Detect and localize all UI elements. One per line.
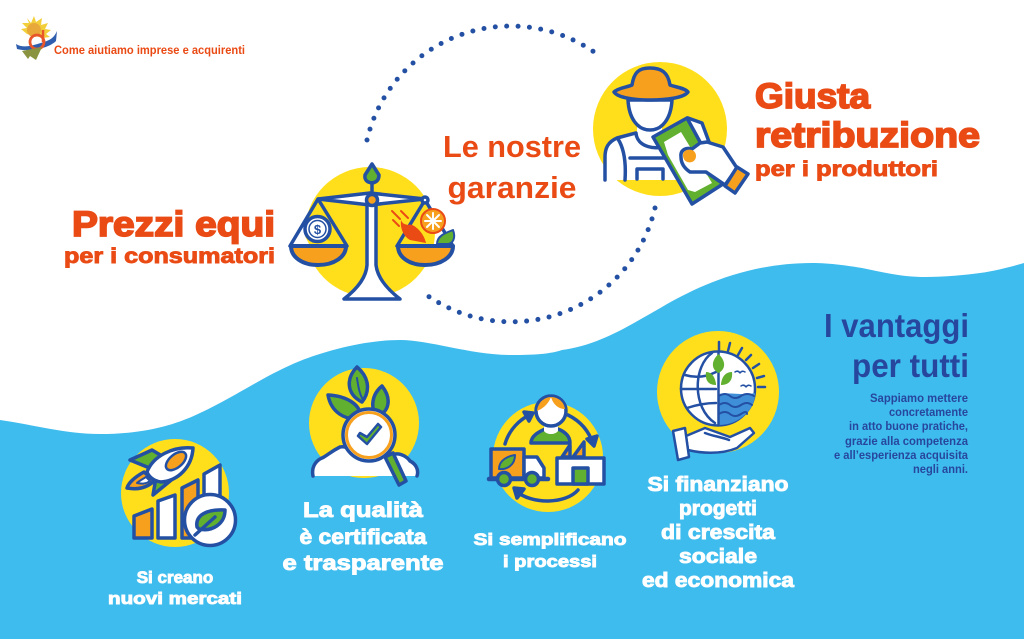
- text block: description: e all’esperienza acquisita: [834, 448, 968, 462]
- heading: i vantaggi per tutti: I vantaggi: [824, 307, 969, 344]
- text block: description: Sappiamo mettere: [870, 391, 968, 405]
- page title: Come aiutiamo imprese e acquirenti: [54, 43, 245, 57]
- label: si finanziano progetti: sociale: [679, 546, 757, 568]
- logo: [16, 16, 57, 60]
- heading: i vantaggi per tutti: [824, 307, 969, 384]
- label: si creano nuovi mercati: Si creano: [137, 568, 213, 587]
- label: si creano nuovi mercati: nuovi mercati: [108, 589, 242, 608]
- label: si finanziano progetti: di crescita: [661, 522, 776, 544]
- text block: description: negli anni.: [913, 462, 968, 476]
- heading: prezzi equi: per i consumatori: [64, 245, 275, 268]
- heading: prezzi equi: Prezzi equi: [72, 205, 275, 244]
- label: si semplificano i processi: Si semplificano: [474, 530, 626, 549]
- label: la qualita certificata: e trasparente: [282, 552, 444, 575]
- label: la qualita certificata: [282, 499, 444, 575]
- label: si finanziano progetti: Si finanziano: [648, 474, 788, 496]
- label: la qualita certificata: è certificata: [300, 526, 427, 549]
- heading: giusta retribuzione: Giusta: [755, 77, 871, 116]
- label: la qualita certificata: La qualità: [303, 499, 423, 522]
- icon: balance scale: [290, 164, 454, 299]
- label: si semplificano i processi: i processi: [503, 552, 597, 571]
- label: si finanziano progetti: progetti: [679, 498, 757, 520]
- label: si semplificano i processi: [474, 530, 626, 571]
- heading: giusta retribuzione: [755, 77, 980, 181]
- heading: giusta retribuzione: per i produttori: [755, 158, 938, 181]
- icon: quality magnifier with leaves: [309, 367, 419, 485]
- icon: globe held by hand: [657, 331, 779, 460]
- icon: farmer with cash: [593, 62, 748, 204]
- label: si creano nuovi mercati: [108, 568, 242, 608]
- label: si finanziano progetti: ed economica: [642, 570, 795, 592]
- heading: giusta retribuzione: retribuzione: [755, 116, 980, 155]
- icon: rocket and growth bars: [121, 439, 236, 547]
- icon: truck, person and factory cycle: [489, 396, 604, 512]
- label: si finanziano progetti: [642, 474, 795, 592]
- heading: i vantaggi per tutti: per tutti: [852, 347, 969, 384]
- heading: le nostre garanzie: Le nostre: [443, 129, 581, 164]
- dotted circle top: [367, 26, 601, 140]
- background wave: [0, 263, 1024, 639]
- heading: prezzi equi: [64, 205, 275, 268]
- heading: le nostre garanzie: [443, 129, 581, 205]
- text block: description: [834, 391, 968, 476]
- heading: le nostre garanzie: garanzie: [448, 170, 576, 205]
- icon: balance scale: $: [314, 222, 322, 237]
- dotted circle bottom: [428, 208, 655, 322]
- text block: description: in atto buone pratiche,: [849, 419, 968, 433]
- text block: description: grazie alla competenza: [845, 434, 968, 448]
- text block: description: concretamente: [889, 405, 968, 419]
